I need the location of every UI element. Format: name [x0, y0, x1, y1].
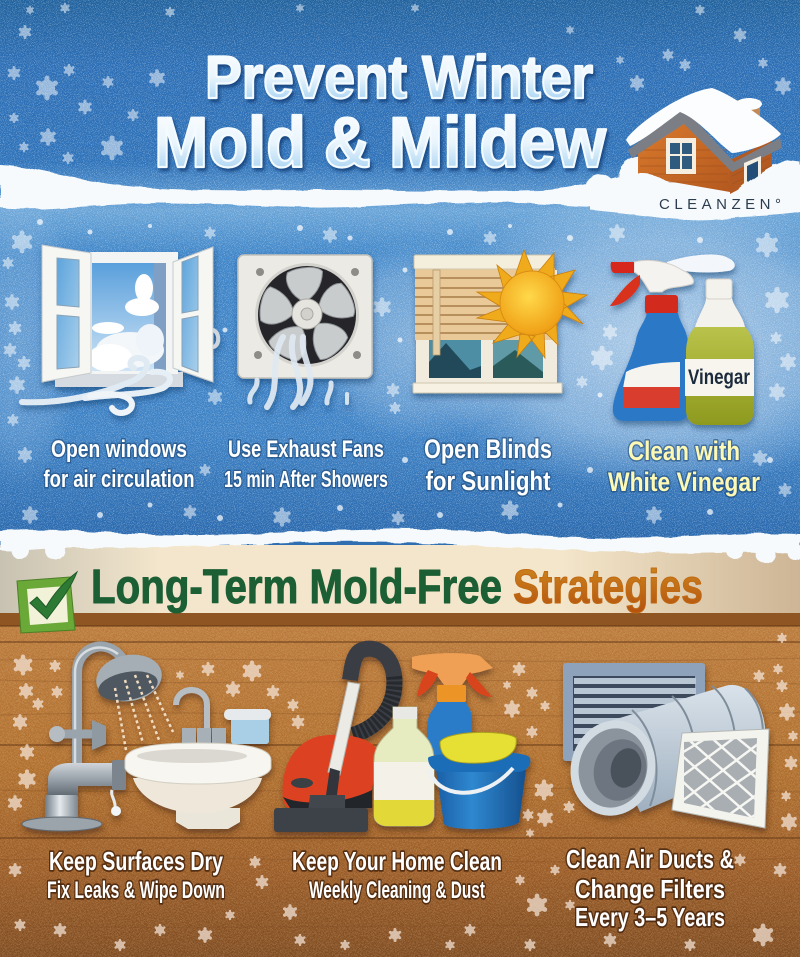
icon: blinds and sun: [413, 250, 587, 393]
panel: heading band: [0, 545, 800, 613]
text: open blinds: Open Blinds: [424, 434, 552, 464]
snow band: lower: [0, 529, 800, 563]
text: open blinds: for Sunlight: [426, 466, 551, 496]
text: keep your home clean: Weekly Cleaning & Dust: [309, 877, 485, 904]
text: clean with vinegar: Clean with: [628, 436, 740, 466]
icon: exhaust fan: [238, 255, 372, 407]
text: exhaust fans: Use Exhaust Fans: [228, 436, 384, 463]
title: Prevent Winter: [205, 44, 593, 111]
heading: long-term strategies: Strategies: [513, 561, 703, 614]
text: clean air ducts: Change Filters: [575, 874, 725, 904]
text: clean air ducts: Every 3–5 Years: [575, 902, 725, 932]
text: open blinds: [424, 434, 552, 496]
icon: open window: [22, 245, 218, 413]
label: Vinegar: Vinegar: [688, 366, 750, 389]
text: open windows: [44, 436, 194, 493]
text: keep surfaces dry: [47, 846, 225, 904]
panel: wood background: [0, 610, 800, 957]
snow band: upper: [0, 156, 800, 219]
logo: CLEANZEN: CLEANZEN°: [659, 196, 781, 213]
text: keep surfaces dry: Fix Leaks & Wipe Down: [47, 877, 225, 904]
text: exhaust fans: 15 min After Showers: [224, 466, 388, 492]
heading: long-term strategies: Long-Term Mold-Free: [91, 561, 502, 614]
icon: air duct and filter: [560, 663, 770, 828]
text: open windows: for air circulation: [44, 466, 194, 493]
title: [154, 44, 607, 183]
title: Mold & Mildew: [154, 104, 607, 183]
text: clean air ducts: [566, 844, 734, 932]
text: clean with vinegar: [608, 436, 760, 497]
icon: vacuum and cleaning supplies: [274, 649, 530, 832]
text: keep your home clean: [292, 846, 502, 904]
icon: sink and shower: [22, 646, 271, 831]
icon: spray bottle and vinegar: [610, 255, 754, 425]
icon: snowy house: [626, 88, 782, 194]
text: open windows: Open windows: [51, 436, 187, 463]
text: clean with vinegar: White Vinegar: [608, 467, 760, 497]
icon: checkbox: [17, 572, 77, 633]
snow mound: house base: [590, 160, 800, 220]
text: exhaust fans: [224, 436, 388, 492]
text: clean air ducts: Clean Air Ducts &: [566, 844, 734, 874]
text: keep your home clean: Keep Your Home Clean: [292, 846, 502, 876]
text: keep surfaces dry: Keep Surfaces Dry: [49, 846, 223, 876]
panel: winter blue background: [0, 0, 800, 540]
